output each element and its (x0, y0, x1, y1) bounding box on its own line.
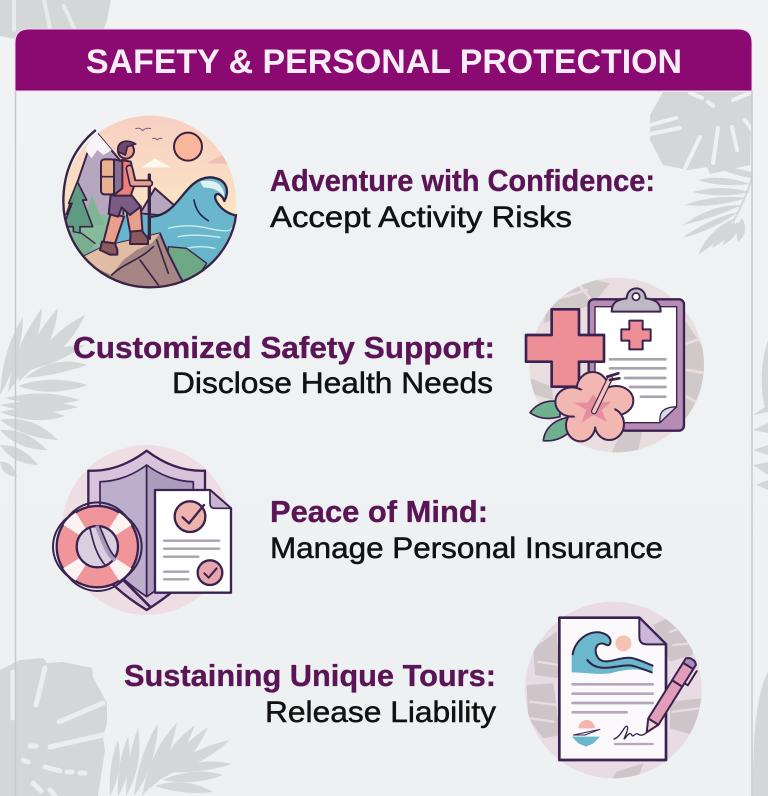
row 4 text (124, 659, 496, 729)
icon: hiker on cliff above wave (60, 113, 240, 293)
title: SAFETY & PERSONAL PROTECTION (86, 43, 682, 81)
row 2 text (73, 331, 495, 400)
heading: customized safety: Customized Safety Support: (73, 331, 495, 365)
palm frond: top right (682, 168, 752, 255)
monstera leaf: bottom left (0, 658, 107, 796)
icon: signed waiver with wave and pen (525, 602, 702, 782)
monstera leaf: top right (650, 92, 752, 174)
monstera leaf: bottom right edge (753, 672, 768, 796)
monstera leaf: top left (0, 0, 111, 40)
heading: peace of mind: Peace of Mind: (270, 495, 488, 529)
palm frond: middle left (0, 308, 88, 477)
subheading: health needs: Disclose Health Needs (172, 367, 493, 400)
palm frond: bottom (110, 723, 232, 796)
title banner (15, 29, 752, 91)
heading: adventure: Adventure with Confidence: (270, 164, 655, 198)
palm frond: right edge (753, 340, 768, 490)
heading: sustaining tours: Sustaining Unique Tours: (124, 659, 496, 693)
row 1 text (270, 164, 655, 234)
subheading: liability: Release Liability (265, 696, 496, 729)
icon: medical clipboard with hibiscus (526, 277, 707, 457)
subheading: accept risks: Accept Activity Risks (270, 201, 572, 234)
row 3 text (270, 495, 663, 565)
subheading: insurance: Manage Personal Insurance (270, 532, 663, 565)
icon: shield, lifebuoy and checked document (53, 445, 232, 615)
